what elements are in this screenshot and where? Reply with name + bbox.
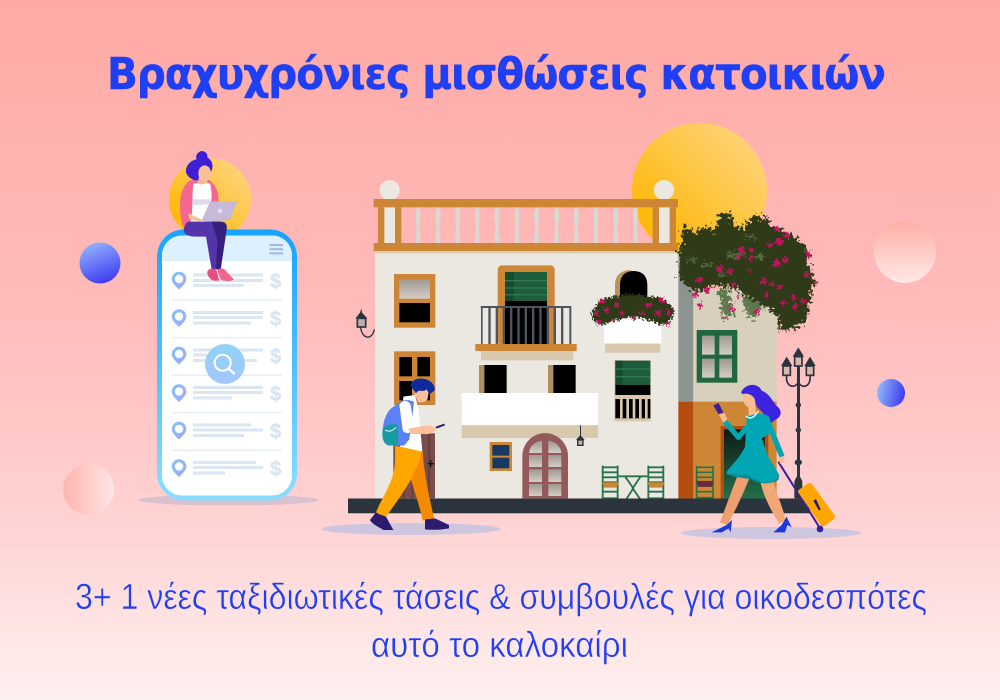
- search button: [205, 344, 245, 384]
- small blue window: [490, 442, 512, 471]
- street lamp post: [781, 347, 816, 498]
- hair: [411, 379, 435, 394]
- ground shadow: phone: [139, 494, 319, 506]
- arched double door: [522, 433, 568, 498]
- price symbols: $: [270, 346, 281, 368]
- sun behind house: [632, 123, 767, 258]
- shoes: [370, 513, 393, 530]
- rooftop balustrade: [374, 180, 678, 253]
- decorative sphere: blue small right: [877, 379, 905, 407]
- house main building: [355, 180, 678, 503]
- side building: [678, 213, 818, 502]
- price symbols: [270, 271, 281, 480]
- left arm: [725, 422, 747, 437]
- listing text lines: [193, 274, 263, 474]
- price symbols: $: [270, 384, 281, 406]
- phone screen: [162, 236, 292, 496]
- suitcase slot: [813, 499, 821, 511]
- front leg: [376, 446, 422, 517]
- ground shadow: woman with suitcase: [681, 527, 861, 539]
- skirt shadow: [727, 474, 779, 483]
- decorative sphere: pale top right: [874, 221, 936, 283]
- price symbols: $: [270, 421, 281, 443]
- suitcase wheel: [817, 526, 823, 532]
- legs: [720, 473, 750, 525]
- phone app mockup: [157, 230, 297, 500]
- man walking with phone: [370, 379, 449, 530]
- price symbols: $: [270, 458, 281, 480]
- title: Βραχυχρόνιες μισθώσεις κατοικιών: [107, 49, 885, 100]
- side building walls: [678, 253, 777, 499]
- green-framed window: [697, 330, 737, 383]
- arched window with flower box: [592, 270, 674, 353]
- subtitle line 2: αυτό το καλοκαίρι: [371, 624, 628, 665]
- right arm: [766, 417, 782, 457]
- price symbols: $: [270, 308, 281, 330]
- high heels: [712, 520, 732, 532]
- upper left window: [394, 274, 435, 328]
- back leg: [411, 450, 434, 521]
- decorative sphere: blue left: [80, 242, 120, 284]
- face and neck: [743, 394, 756, 418]
- decorative sphere: pink bottom left: [63, 464, 114, 515]
- wooden door: [393, 433, 435, 498]
- lower twin windows: [479, 365, 576, 393]
- menu icon: [270, 244, 283, 254]
- suitcase: [798, 483, 835, 526]
- sidewalk: [348, 498, 810, 513]
- dress: [727, 413, 779, 483]
- row separators: [172, 300, 282, 451]
- backpack: [382, 400, 414, 446]
- wall lamp left: [355, 308, 374, 337]
- phone: [436, 424, 445, 429]
- ground shadow: man: [321, 523, 501, 535]
- central balcony with shutter: [475, 265, 577, 360]
- bougainvillea foliage: [679, 213, 818, 331]
- phone body: [157, 230, 297, 500]
- price symbols: $: [270, 271, 281, 293]
- green chair: [697, 466, 713, 502]
- right shuttered window: [614, 360, 651, 421]
- hair: [741, 385, 781, 426]
- shirt torso: [400, 395, 422, 452]
- lower left window: [394, 351, 435, 405]
- subtitle: [75, 576, 927, 665]
- woman with suitcase: [712, 385, 835, 532]
- cafe chairs and table: [603, 466, 663, 503]
- arm: [399, 401, 414, 433]
- small hanging lamp: [576, 425, 585, 445]
- phone: [713, 403, 723, 414]
- woman sitting with laptop: [180, 151, 237, 281]
- suitcase handle: [778, 462, 819, 527]
- neck and head: [412, 385, 429, 403]
- building wall: [375, 253, 678, 498]
- location pins: [172, 272, 186, 477]
- sun behind woman on phone: [169, 158, 251, 240]
- white balcony: [462, 393, 598, 438]
- necklace: [746, 411, 758, 418]
- green door: [721, 426, 768, 499]
- app header bar: [162, 236, 292, 261]
- hands: [718, 413, 785, 464]
